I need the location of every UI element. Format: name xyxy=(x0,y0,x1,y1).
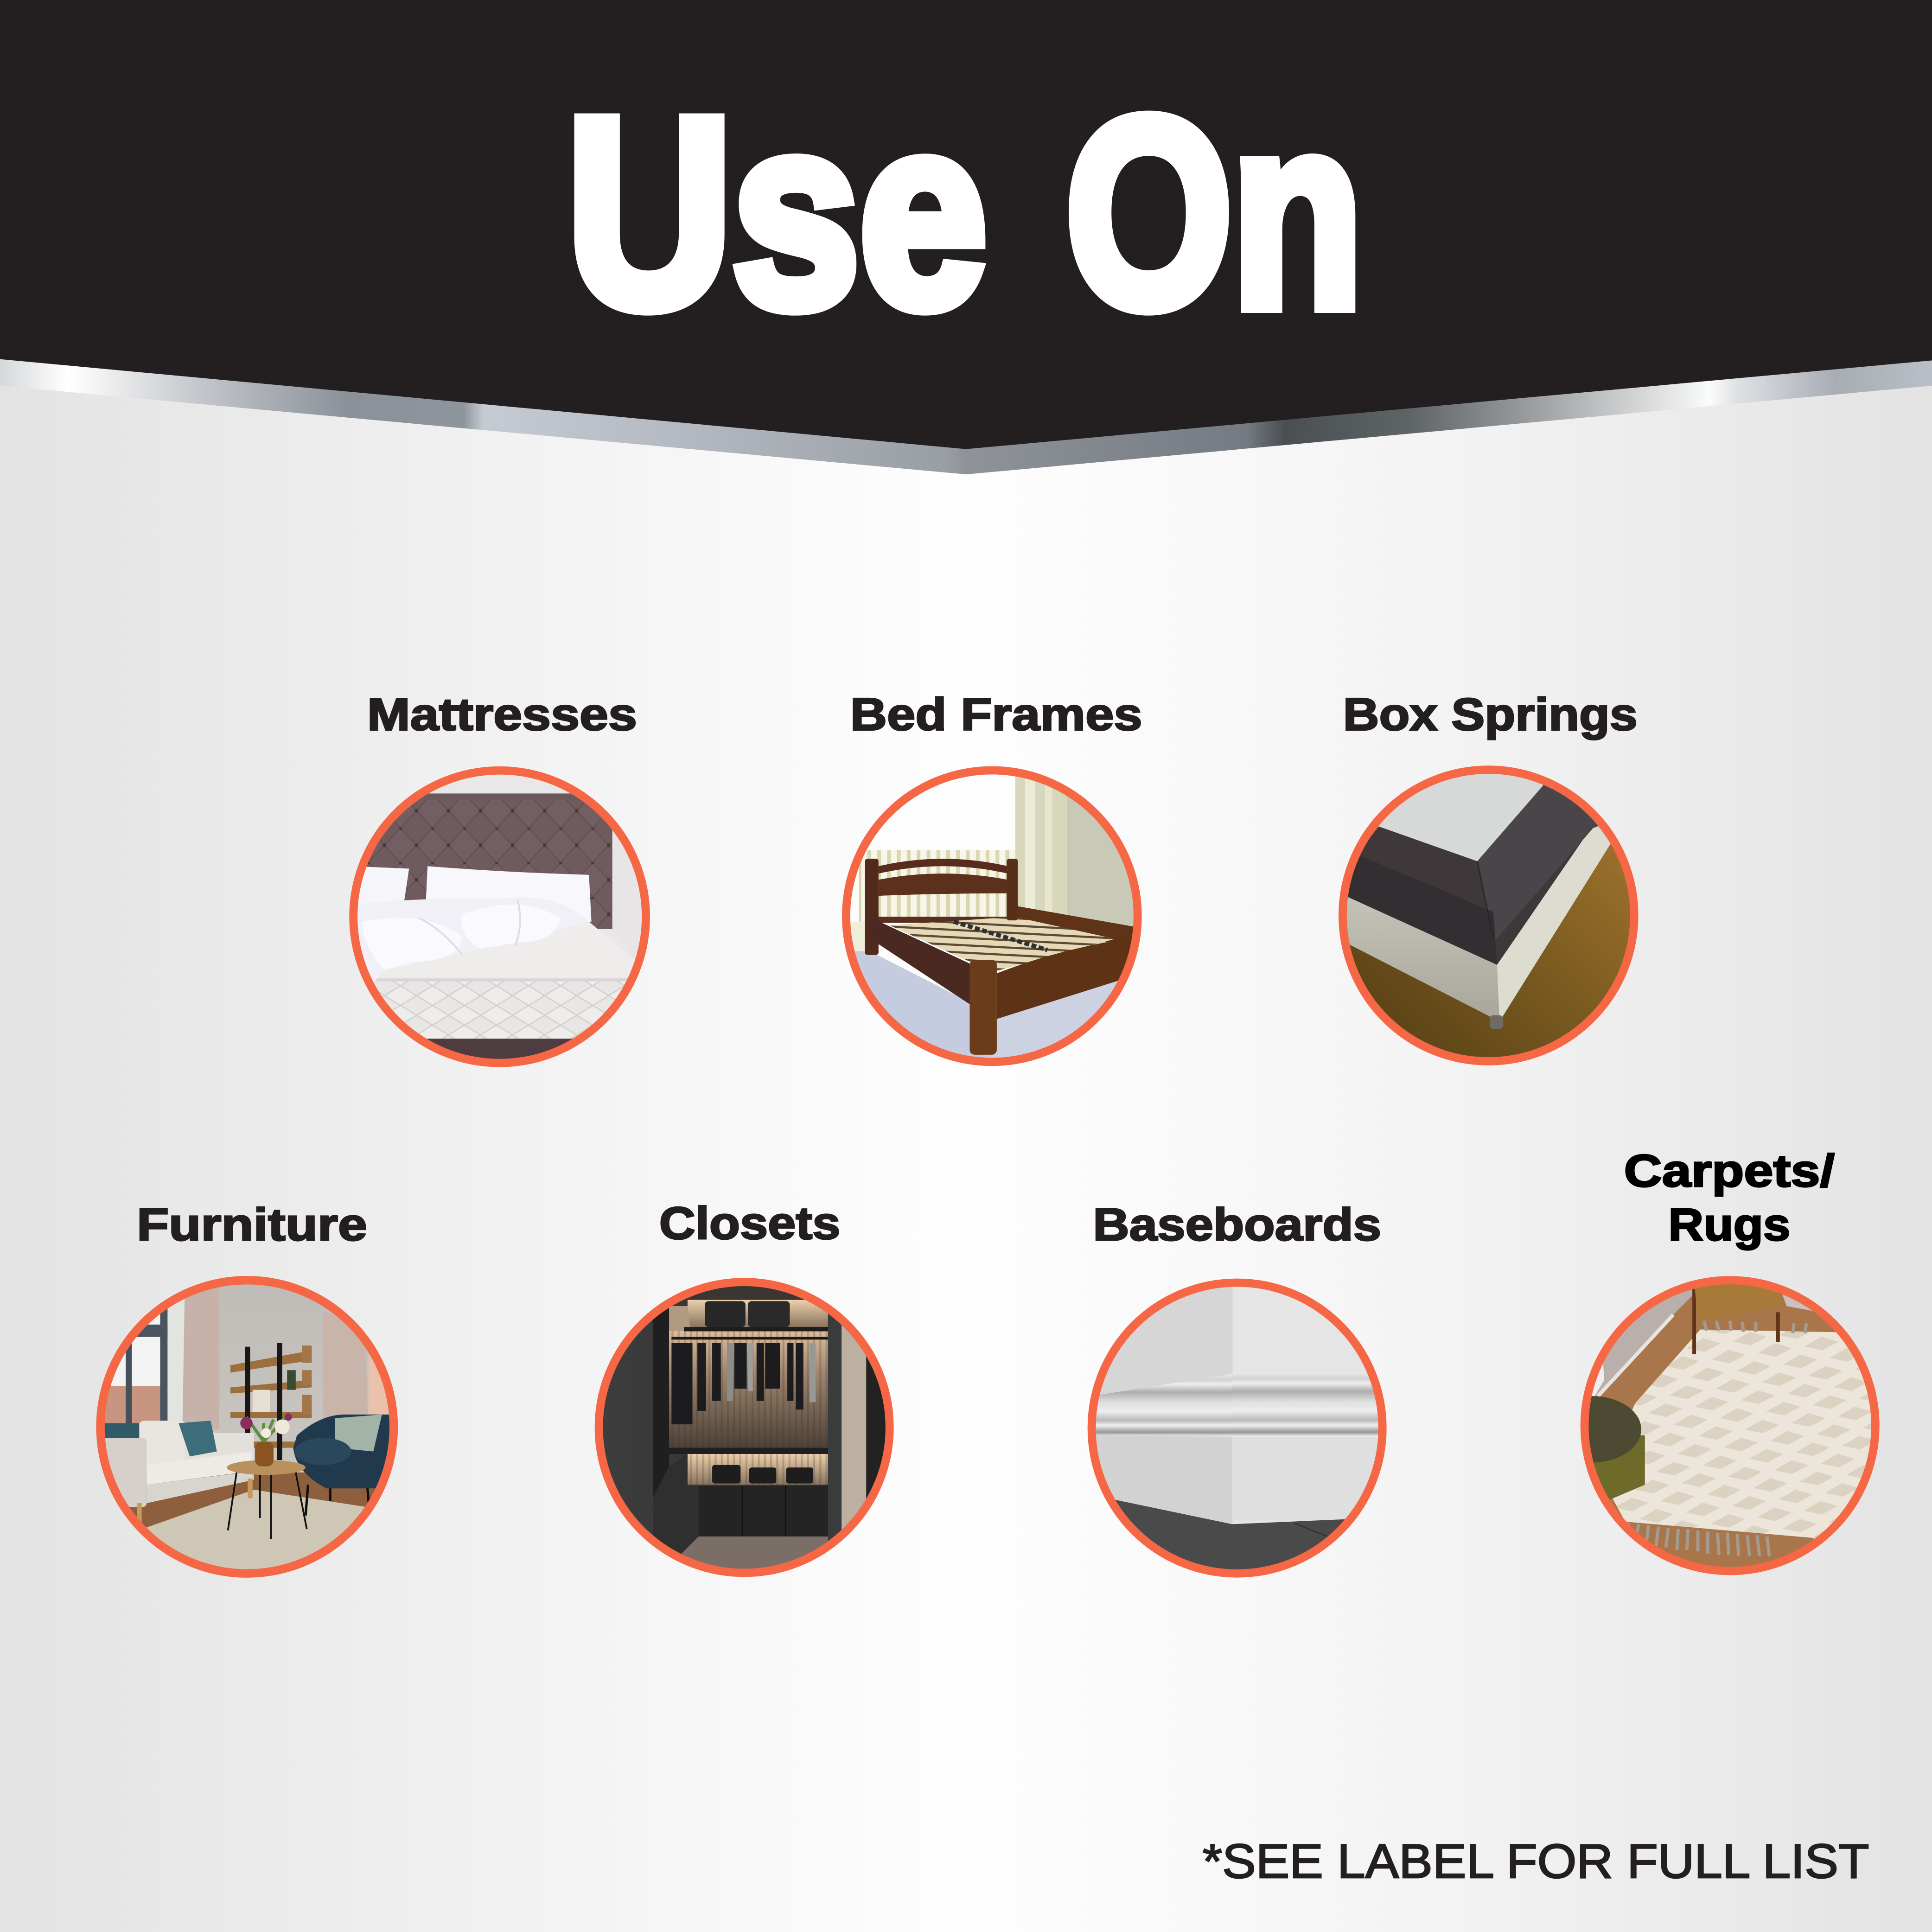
orange ring xyxy=(353,771,646,1063)
photo: living room xyxy=(92,1273,401,1581)
photo: mattress with tufted headboard xyxy=(358,775,642,1059)
sofa xyxy=(92,1421,254,1530)
title: On xyxy=(1066,63,1363,363)
photo: box spring corner xyxy=(1346,774,1630,1057)
storage bins xyxy=(671,1301,828,1339)
photo: white baseboard corner xyxy=(1084,1275,1393,1583)
panel: Carpets/Rugs xyxy=(1543,1145,1885,1581)
orange ring xyxy=(101,1280,394,1574)
title xyxy=(567,63,1363,363)
leather chair xyxy=(1694,1282,1782,1354)
label: Closets: Closets xyxy=(659,1198,840,1249)
header banner xyxy=(0,0,1932,474)
panel: Box Springs xyxy=(1337,689,1645,1072)
silver chevron strip xyxy=(0,358,1932,474)
label: Carpets/Rugs: Carpets/ xyxy=(1624,1145,1835,1196)
folded stacks xyxy=(712,1465,813,1484)
shelf unit xyxy=(230,1343,312,1460)
label: Mattresses: Mattresses xyxy=(367,689,637,740)
photo: walk-in closet xyxy=(592,1275,899,1583)
hanging clothes xyxy=(671,1343,816,1424)
footnote: *SEE LABEL FOR FULL LIST xyxy=(1203,1834,1869,1888)
panel: Bed Frames xyxy=(838,689,1146,1072)
black header shape xyxy=(0,0,1932,449)
title: Use xyxy=(567,63,987,363)
label: Bed Frames: Bed Frames xyxy=(850,689,1142,740)
label: Furniture: Furniture xyxy=(137,1199,367,1250)
orange ring xyxy=(1585,1280,1875,1571)
label: Carpets/Rugs xyxy=(1624,1145,1835,1250)
label: Carpets/Rugs: Rugs xyxy=(1668,1199,1790,1250)
photo: wooden bed frame xyxy=(850,776,1134,1058)
orange ring xyxy=(846,770,1138,1062)
orange ring xyxy=(1092,1282,1383,1574)
armchair xyxy=(293,1415,392,1516)
panel: Closets xyxy=(592,1198,899,1583)
label: Baseboards: Baseboards xyxy=(1093,1199,1381,1250)
side table xyxy=(227,1413,307,1539)
photo: patterned rug xyxy=(1543,1273,1885,1581)
orange ring xyxy=(1343,770,1634,1061)
fringe xyxy=(1626,1321,1806,1556)
label: Box Springs: Box Springs xyxy=(1343,689,1638,740)
panel: Baseboards xyxy=(1084,1199,1393,1583)
orange ring xyxy=(599,1282,890,1573)
panel: Furniture xyxy=(92,1199,401,1581)
ottoman xyxy=(1543,1396,1645,1505)
panel: Mattresses xyxy=(345,689,653,1072)
